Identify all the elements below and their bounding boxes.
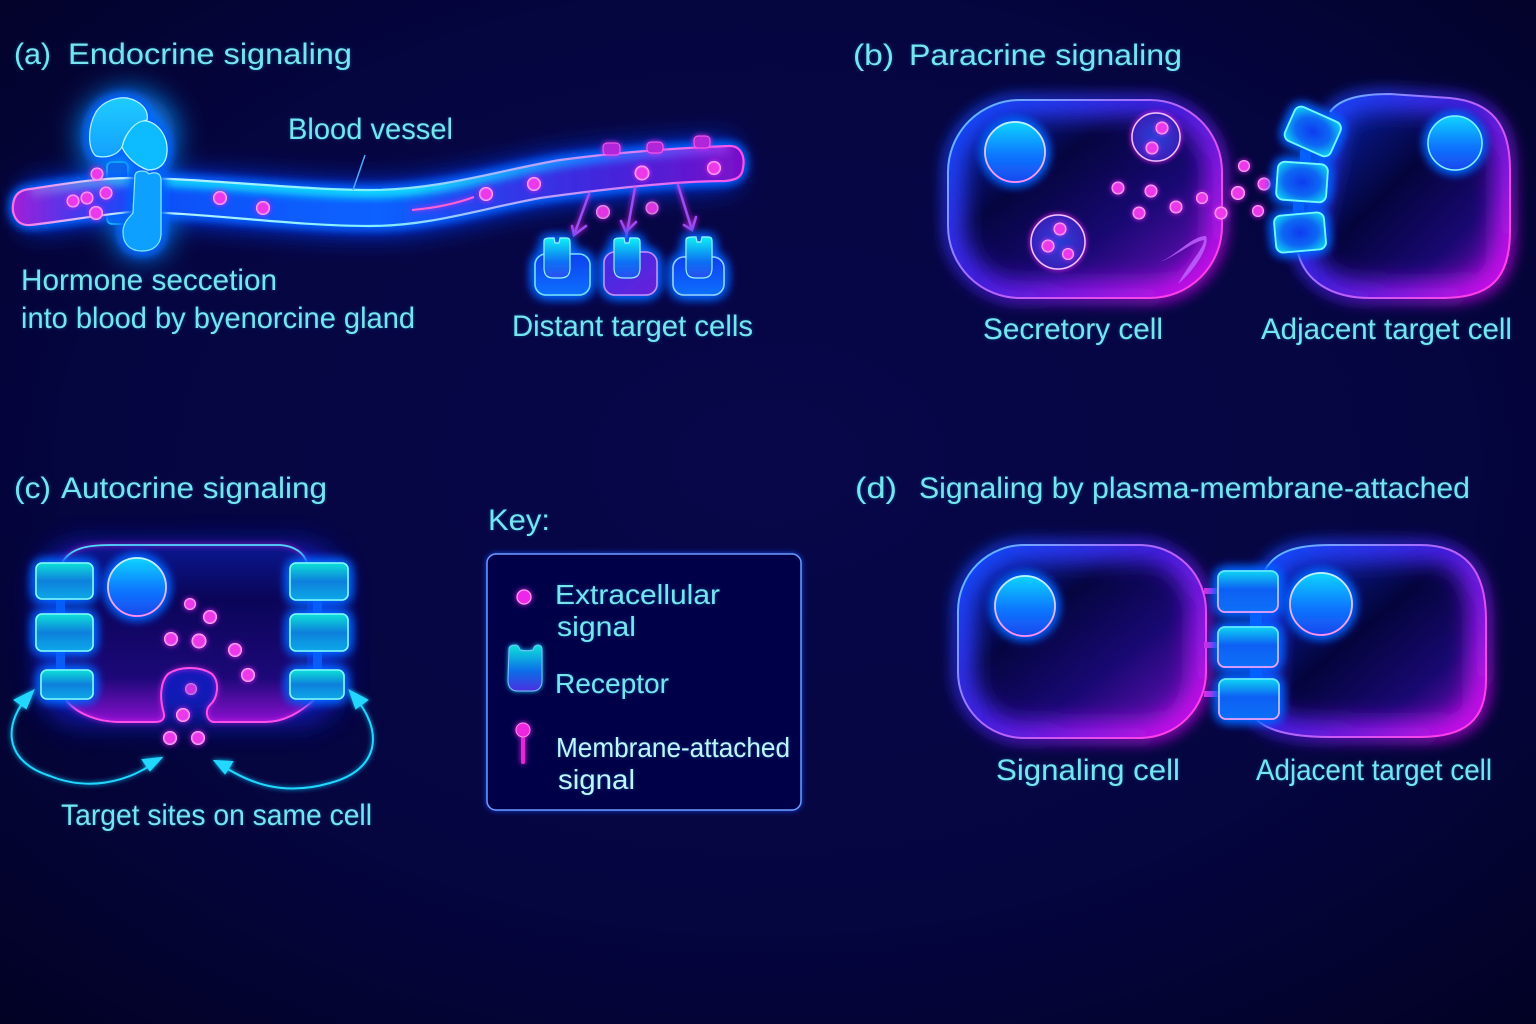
blood vessel tube: [13, 146, 744, 226]
membrane tethers: [1204, 588, 1219, 697]
text: membrane-attached signal: signal: [558, 764, 635, 795]
heading: plasma-membrane: Signaling by plasma-membrane-attached: [919, 472, 1470, 505]
label: signaling cell: Signaling cell: [996, 754, 1180, 787]
autocrine cell body: [62, 545, 307, 722]
vessel bumps: [603, 136, 710, 155]
heading: paracrine: (b): [853, 39, 894, 72]
curved arrow left: [12, 691, 161, 784]
target cell 1: [535, 238, 590, 295]
bright streak in vessel: [412, 197, 474, 210]
heading: endocrine: Endocrine signaling: [68, 38, 352, 71]
panel: plasma-membrane-attached signaling: [855, 472, 1492, 787]
label: secretory cell: Secretory cell: [983, 313, 1163, 346]
text: receptor: Receptor: [555, 668, 669, 699]
nucleus target: [1428, 116, 1482, 170]
label: into blood: into blood by byenorcine gland: [21, 302, 415, 335]
panel: paracrine signaling: [853, 39, 1512, 346]
nucleus: [985, 122, 1045, 182]
nucleus adjacent: [1290, 573, 1352, 635]
vesicle upper: [1132, 113, 1180, 161]
secretory cell: [948, 100, 1222, 298]
halo around vessel and gland: [25, 91, 735, 256]
text: extracellular signal: Extracellular: [555, 579, 720, 610]
panel: autocrine signaling: [12, 472, 373, 832]
heading: key: Key:: [488, 504, 550, 537]
heading: autocrine: (c): [14, 472, 51, 505]
panel: key: [487, 504, 801, 810]
text: extracellular signal: [555, 579, 720, 642]
pointer line: [353, 155, 365, 190]
secreted signals: [1112, 160, 1270, 220]
label: distant target cells: Distant target cells: [512, 310, 753, 343]
label: adjacent target cell: Adjacent target cell: [1261, 313, 1512, 346]
nucleus signaling: [995, 576, 1055, 636]
icon: membrane-attached signal: [516, 723, 530, 764]
text: membrane-attached signal: Membrane-attached: [556, 732, 790, 763]
heading: plasma-membrane: (d): [855, 472, 897, 505]
label: target sites: Target sites on same cell: [61, 799, 372, 832]
receptors: [1218, 571, 1279, 719]
heading: paracrine: Paracrine signaling: [909, 39, 1182, 72]
adjacent target cell: [1298, 94, 1510, 298]
receptors left: [36, 563, 93, 699]
nucleus: [108, 558, 166, 616]
target cell 3: [673, 237, 724, 295]
organelle streak: [1160, 236, 1207, 284]
label: blood vessel: Blood vessel: [288, 113, 453, 146]
small membrane tube behind vessel: [107, 162, 128, 224]
heading: autocrine: Autocrine signaling: [61, 472, 327, 505]
endocrine gland: [90, 98, 167, 251]
text: extracellular signal: signal: [557, 611, 636, 642]
receptor links: [1250, 612, 1262, 679]
halo: [40, 545, 340, 723]
icon: receptor: [508, 645, 542, 691]
label: hormone secretion: Hormone seccetion: [21, 264, 277, 297]
heading: endocrine: (a): [14, 38, 51, 71]
receptor connectors: [1293, 150, 1311, 218]
connectors: [56, 599, 322, 670]
autocrine signals: [163, 598, 255, 745]
target cell 2: [604, 238, 657, 295]
panel: endocrine signaling: [13, 38, 753, 343]
cell membrane outline: [62, 545, 314, 722]
receptors right: [290, 563, 348, 699]
hormone dots: [66, 161, 721, 220]
adjacent cell: [1257, 545, 1486, 737]
icon: extracellular signal: [517, 590, 531, 604]
arrows to target cells: [572, 185, 696, 238]
receptors: [1274, 104, 1343, 253]
key frame: [487, 554, 801, 810]
vesicle lower: [1031, 215, 1085, 269]
signaling cell: [958, 545, 1206, 738]
curved arrow right: [215, 691, 373, 789]
text: membrane-attached signal: [556, 732, 790, 795]
label: adjacent target cell: Adjacent target cell: [1256, 754, 1492, 787]
